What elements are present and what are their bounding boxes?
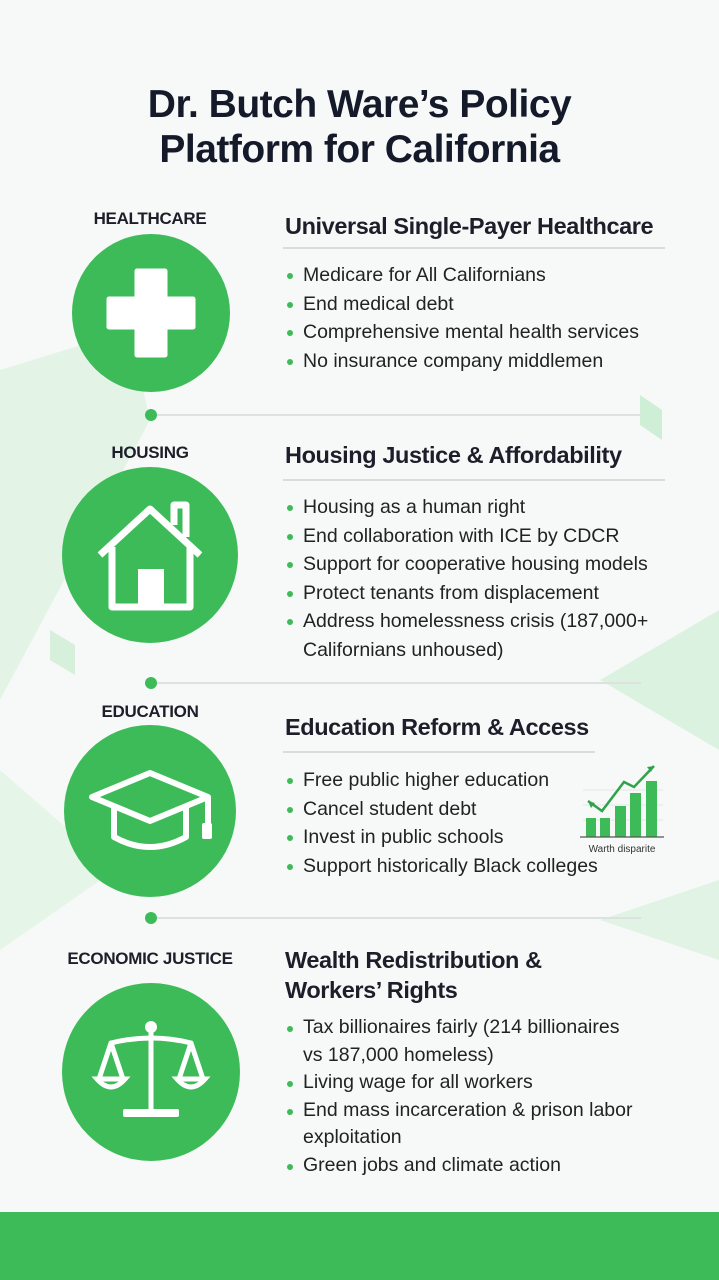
bullet list: Tax billionaires fairly (214 billionaires — [303, 1016, 619, 1038]
heading: Housing Justice & Affordability — [285, 442, 622, 468]
title — [148, 83, 572, 171]
icon: scales — [62, 983, 240, 1161]
heading: Universal Single-Payer Healthcare — [285, 213, 653, 239]
bullet list — [287, 1016, 632, 1176]
bullet list: Free public higher education — [303, 769, 549, 791]
label: healthcare: HEALTHCARE — [94, 209, 206, 228]
heading: Wealth Redistribution & — [285, 947, 542, 973]
bullet list: End collaboration with ICE by CDCR — [303, 524, 619, 546]
label: economic justice: ECONOMIC JUSTICE — [67, 949, 233, 968]
bullet list — [287, 769, 598, 876]
section: housing — [62, 442, 665, 660]
bullet list: Protect tenants from displacement — [303, 582, 599, 604]
heading: Education Reform & Access — [285, 714, 589, 740]
bullet list: Address homelessness crisis (187,000+ — [303, 610, 648, 632]
section: healthcare — [72, 209, 665, 392]
title: Platform for California — [159, 128, 560, 171]
bullet list — [287, 496, 648, 660]
section: education — [64, 702, 664, 897]
label: housing: HOUSING — [111, 443, 189, 462]
bullet list: Comprehensive mental health services — [303, 321, 639, 343]
bullet list: Housing as a human right — [303, 496, 525, 518]
chart: wealth disparity — [580, 765, 664, 855]
bullet list — [287, 264, 639, 372]
bullet list: Invest in public schools — [303, 826, 504, 848]
icon: medical cross — [72, 234, 230, 392]
bullet list: vs 187,000 homeless) — [303, 1044, 494, 1066]
bullet list: Medicare for All Californians — [303, 264, 546, 286]
heading — [285, 947, 542, 1003]
bullet list: No insurance company middlemen — [303, 350, 603, 372]
title: Dr. Butch Ware’s Policy — [148, 83, 571, 126]
footer bar — [0, 1212, 719, 1280]
bullet list: Green jobs and climate action — [303, 1154, 561, 1176]
bullet list: End mass incarceration & prison labor — [303, 1098, 632, 1120]
bullet list: Californians unhoused) — [303, 638, 504, 660]
icon: graduation cap — [64, 725, 236, 897]
chart: wealth disparity: Warth disparite — [589, 844, 656, 855]
section: economic justice — [62, 947, 632, 1176]
bullet list: exploitation — [303, 1126, 402, 1148]
icon: house — [62, 467, 238, 643]
bullet list: End medical debt — [303, 292, 454, 314]
heading: Workers’ Rights — [285, 977, 457, 1003]
bullet list: Support historically Black colleges — [303, 854, 598, 876]
bullet list: Living wage for all workers — [303, 1071, 533, 1093]
label: education: EDUCATION — [101, 702, 199, 721]
bullet list: Support for cooperative housing models — [303, 553, 648, 575]
bullet list: Cancel student debt — [303, 798, 476, 820]
